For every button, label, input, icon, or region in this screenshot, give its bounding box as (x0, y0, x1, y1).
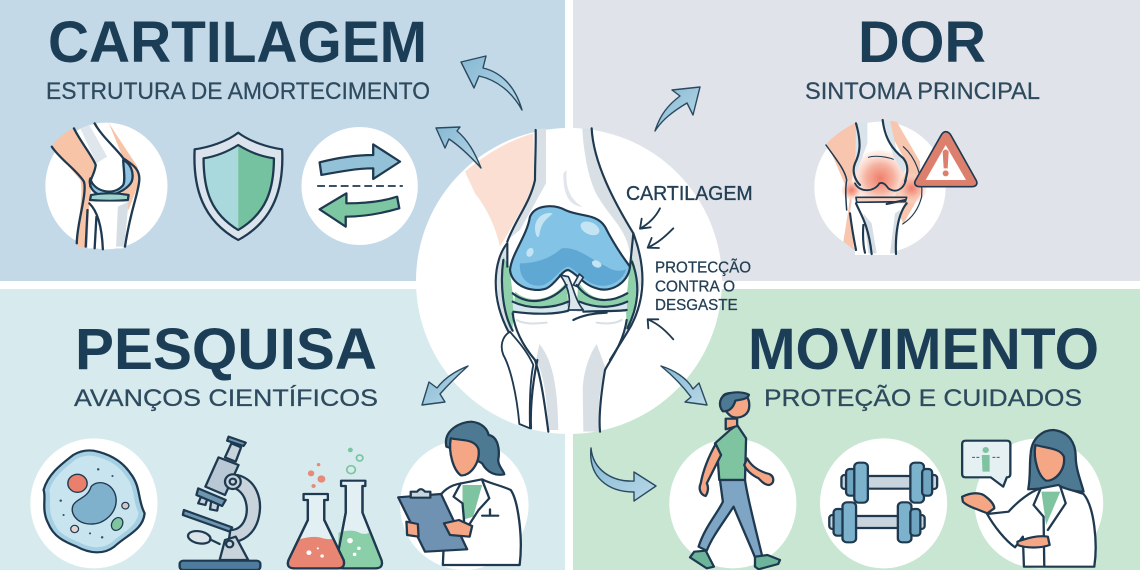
femur shading (507, 128, 546, 240)
icon: walking person (669, 392, 796, 569)
arrow: to cartilagem upper (461, 56, 522, 110)
icon: doctor with speech bubble (962, 430, 1103, 568)
small label arrows (640, 208, 673, 339)
icon: cell (30, 438, 157, 568)
label: proteccao contra o desgaste: PROTECÇÃO (655, 257, 751, 277)
icon: researcher with clipboard (398, 422, 529, 570)
icon: bidirectional arrows in circle (301, 127, 418, 245)
heading: movimento: MOVIMENTO (748, 317, 1099, 382)
arrow: to pesquisa (422, 366, 468, 405)
label: proteccao contra o desgaste: DESGASTE (655, 297, 738, 314)
heading: cartilagem: CARTILAGEM (48, 10, 427, 75)
icon: shield (194, 133, 282, 240)
skin patch (465, 133, 535, 247)
panel: cartilagem (0, 0, 565, 281)
label: cartilagem: CARTILAGEM (626, 183, 753, 205)
panel: dor (573, 0, 1140, 281)
subtitle: protecao e cuidados: PROTEÇÃO E CUIDADOS (764, 385, 1082, 412)
cartilage highlights (535, 213, 553, 237)
central white circle (416, 128, 722, 434)
arrow: to movimento (661, 366, 707, 405)
cartilage (510, 206, 630, 290)
heading: dor: DOR (858, 10, 986, 75)
meniscus green side (501, 257, 515, 332)
tibia and fibula (536, 344, 558, 430)
arrow: curved to walking person (591, 448, 656, 501)
icon: dumbbells (820, 438, 947, 568)
label: proteccao contra o desgaste (655, 257, 751, 314)
heading: pesquisa: PESQUISA (75, 317, 377, 382)
icon: knee in circle (45, 123, 167, 249)
icon: flasks (288, 448, 382, 568)
subtitle: estrutura de amortecimento: ESTRUTURA DE AMORTECIMENTO (46, 78, 430, 105)
central knee diagram (416, 128, 753, 434)
icon: microscope (180, 437, 260, 570)
subtitle: avancos cientificos: AVANÇOS CIENTÍFICOS (74, 385, 378, 412)
capsule shading (497, 244, 513, 333)
panel: pesquisa (0, 289, 565, 570)
arrow: to dor (655, 87, 700, 131)
panel: movimento (573, 289, 1140, 570)
subtitle: sintoma principal: SINTOMA PRINCIPAL (805, 78, 1040, 105)
arrow: to cartilagem lower (436, 127, 481, 168)
femur and capsule outlines (507, 130, 536, 242)
label: proteccao contra o desgaste: CONTRA O (655, 278, 735, 295)
icon: painful knee (814, 120, 977, 255)
ligaments (560, 275, 583, 310)
